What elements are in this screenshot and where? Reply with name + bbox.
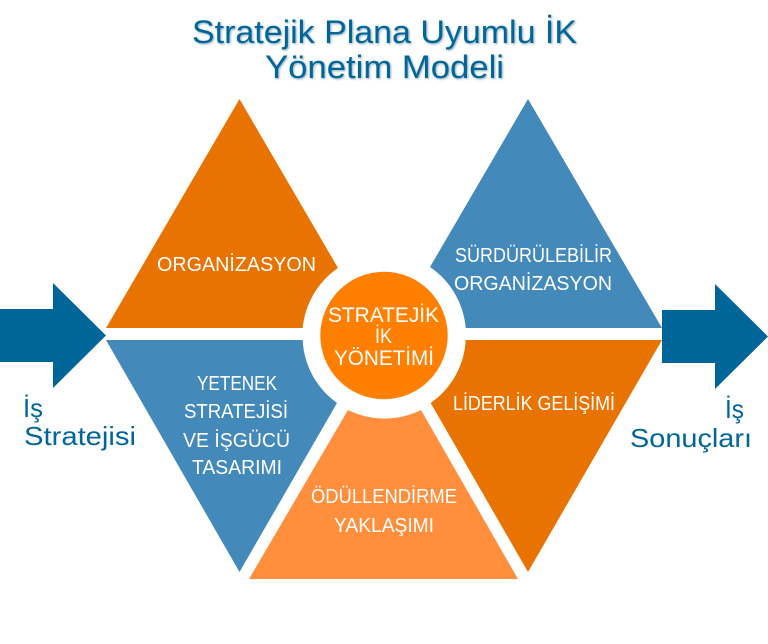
- panel: Sürdürülebilir Organizasyon: SÜRDÜRÜLEBİLİR: [455, 244, 612, 267]
- label: İş Stratejisi: İş: [23, 393, 43, 423]
- center circle: Stratejik İK Yönetimi: İK: [375, 325, 392, 348]
- label: İş Stratejisi: [23, 393, 136, 451]
- panel: Ödüllendirme Yaklaşımı: ÖDÜLLENDİRME: [311, 485, 457, 508]
- arrow: right output: [662, 284, 768, 389]
- label: İş Sonuçları: [630, 394, 752, 453]
- title: Yönetim Modeli: [265, 49, 504, 85]
- panel: Yetenek Stratejisi ve İşgücü Tasarımı: STRATEJİSİ: [184, 400, 288, 423]
- panel: Ödüllendirme Yaklaşımı: [249, 410, 518, 579]
- panel: Sürdürülebilir Organizasyon: [430, 99, 662, 328]
- center circle: Stratejik İK Yönetimi: [320, 272, 448, 399]
- label: İş Sonuçları: İş: [725, 394, 744, 424]
- label: İş Sonuçları: Sonuçları: [630, 423, 752, 453]
- title: [192, 14, 577, 85]
- panel: Yetenek Stratejisi ve İşgücü Tasarımı: VE İŞGÜCÜ: [183, 429, 290, 452]
- center circle: Stratejik İK Yönetimi: YÖNETİMİ: [334, 347, 434, 370]
- panel: Yetenek Stratejisi ve İşgücü Tasarımı: TASARIMI: [192, 457, 282, 479]
- panel: Yetenek Stratejisi ve İşgücü Tasarımı: [106, 340, 337, 572]
- panel: Sürdürülebilir Organizasyon: ORGANİZASYON: [454, 272, 612, 295]
- panel: Yetenek Stratejisi ve İşgücü Tasarımı: YETENEK: [197, 373, 278, 395]
- panel: Liderlik Gelişimi: [431, 340, 662, 572]
- panel: Organizasyon: [106, 99, 338, 328]
- panel: Organizasyon: ORGANİZASYON: [157, 253, 316, 276]
- center circle: Stratejik İK Yönetimi: STRATEJİK: [328, 304, 439, 327]
- arrow: left input: [0, 283, 106, 388]
- panel: Liderlik Gelişimi: LİDERLİK GELİŞİMİ: [453, 392, 615, 415]
- label: İş Stratejisi: Stratejisi: [24, 421, 136, 451]
- panel: Ödüllendirme Yaklaşımı: YAKLAŞIMI: [334, 515, 434, 537]
- title: Stratejik Plana Uyumlu İK: [192, 14, 577, 50]
